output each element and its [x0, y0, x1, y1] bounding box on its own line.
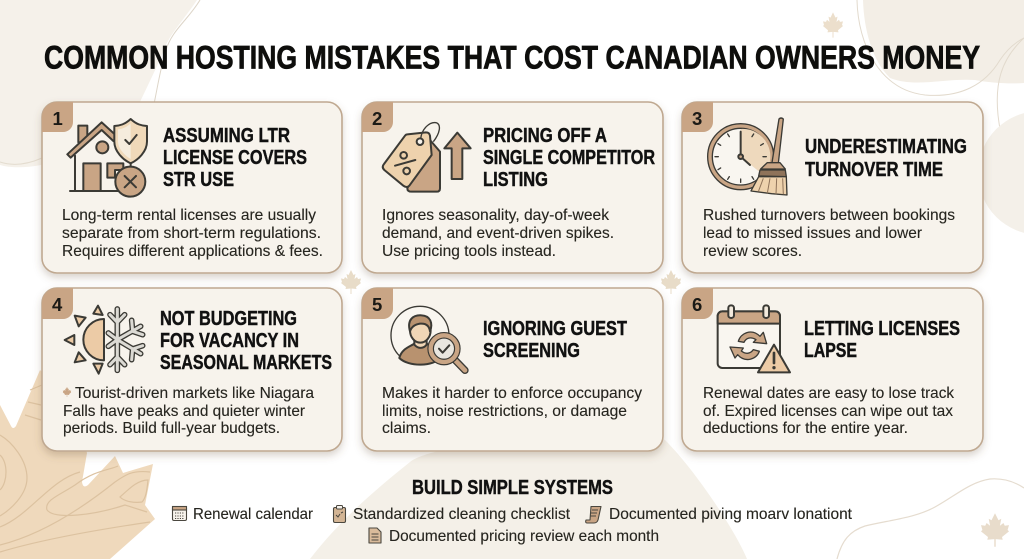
heading 2: SINGLE COMPETITOR: [483, 147, 655, 169]
body text 5: limits, noise restrictions, or damage: [382, 403, 627, 420]
heading 5: SCREENING: [483, 340, 580, 362]
heading 3: UNDERESTIMATING: [805, 136, 967, 158]
heading 3: TURNOVER TIME: [805, 159, 943, 181]
heading 6: LAPSE: [804, 340, 857, 362]
number badge 5: 5: [372, 294, 382, 315]
icon: calendar with renewal arrows and warning: [718, 305, 790, 372]
body text 4: Tourist-driven markets like Niagara: [75, 385, 314, 402]
heading 5: [483, 318, 627, 362]
panel: mistake 6: [682, 288, 983, 451]
heading 2: [483, 125, 655, 191]
item: documented location: Documented piving moarv lonationt: [609, 506, 853, 523]
number badge 4: [42, 288, 73, 319]
body text 2: demand, and event-driven spikes.: [382, 225, 614, 242]
heading 4: NOT BUDGETING: [160, 308, 297, 330]
icon: person under magnifier: [391, 306, 465, 370]
panel: mistake 4: [42, 288, 342, 451]
panel: mistake 3: [682, 102, 983, 273]
icon: small maple leaf middle: [661, 270, 681, 294]
body text 1: [62, 207, 323, 260]
heading 6: [804, 318, 960, 362]
background: top-right blob: [857, 0, 1024, 194]
background: top-left blob: [0, 0, 200, 167]
heading 5: IGNORING GUEST: [483, 318, 627, 340]
icon: house, shield and cross: [67, 119, 147, 197]
icon: price tags and up arrow: [383, 123, 471, 192]
heading: build simple systems: BUILD SIMPLE SYSTEMS: [412, 477, 613, 499]
body text 3: review scores.: [703, 243, 802, 260]
body text 6: deductions for the entire year.: [703, 420, 908, 437]
background: right blob: [978, 111, 1024, 235]
heading 4: FOR VACANCY IN: [160, 330, 299, 352]
number badge 6: 6: [692, 294, 702, 315]
number badge 5: [362, 288, 393, 319]
number badge 3: 3: [692, 108, 702, 129]
body text 5: [382, 385, 642, 437]
heading 1: [163, 125, 307, 191]
icon: small maple leaf left: [341, 270, 361, 294]
section: build simple systems: [172, 477, 853, 545]
icon: clipboard: [334, 506, 346, 522]
number badge 2: [362, 102, 393, 132]
background: large maple leaf: [0, 370, 155, 559]
heading 3: [805, 136, 967, 181]
heading 1: STR USE: [163, 169, 234, 191]
body text 2: [382, 207, 614, 260]
background: bottom hill: [310, 436, 747, 559]
number badge 4: 4: [52, 294, 63, 315]
heading 4: [160, 308, 332, 374]
body text 3: lead to missed issues and lower: [703, 225, 923, 242]
heading 6: LETTING LICENSES: [804, 318, 960, 340]
heading 1: ASSUMING LTR: [163, 125, 290, 147]
icon: calendar: [172, 506, 186, 520]
number badge 1: [42, 102, 73, 132]
body text 3: Rushed turnovers between bookings: [703, 207, 955, 224]
number badge 3: [682, 102, 713, 132]
icon: small maple leaf top: [823, 12, 843, 38]
body text 6: Renewal dates are easy to lose track: [703, 385, 955, 402]
item: pricing review: Documented pricing review each month: [389, 528, 659, 545]
body text 2: Ignores seasonality, day-of-week: [382, 207, 610, 224]
body text 1: Long-term rental licenses are usually: [62, 207, 316, 224]
heading 2: PRICING OFF A: [483, 125, 607, 147]
heading 1: LICENSE COVERS: [163, 147, 307, 169]
icon: scroll: [586, 506, 601, 523]
icon: bullet leaf: [63, 387, 71, 397]
body text 4: [63, 385, 314, 437]
body text 1: Requires different applications & fees.: [62, 243, 323, 260]
number badge 2: 2: [372, 108, 382, 129]
body text 6: [703, 385, 955, 437]
background: bottom-right outline: [837, 479, 1024, 559]
body text 4: Falls have peaks and quieter winter: [63, 403, 306, 420]
number badge 6: [682, 288, 713, 319]
icon: half sun half snowflake: [65, 306, 143, 374]
heading 4: SEASONAL MARKETS: [160, 352, 332, 374]
body text 6: of. Expired licenses can wipe out tax: [703, 403, 953, 420]
item: cleaning checklist: Standardized cleaning checklist: [353, 506, 571, 523]
body text 5: claims.: [382, 420, 431, 437]
icon: document: [369, 528, 381, 543]
body text 5: Makes it harder to enforce occupancy: [382, 385, 642, 402]
body text 1: separate from short-term regulations.: [62, 225, 321, 242]
body text 4: periods. Build full-year budgets.: [63, 420, 280, 437]
body text 2: Use pricing tools instead.: [382, 243, 556, 260]
heading 2: LISTING: [483, 169, 548, 191]
panel: mistake 5: [362, 288, 663, 451]
panel: mistake 2: [362, 102, 663, 273]
panel: mistake 1: [42, 102, 342, 273]
body text 3: [703, 207, 955, 260]
number badge 1: 1: [52, 108, 63, 129]
icon: small maple leaf bottom right: [981, 513, 1009, 547]
item: renewal calendar: Renewal calendar: [193, 506, 314, 523]
icon: clock and broom: [708, 118, 787, 195]
